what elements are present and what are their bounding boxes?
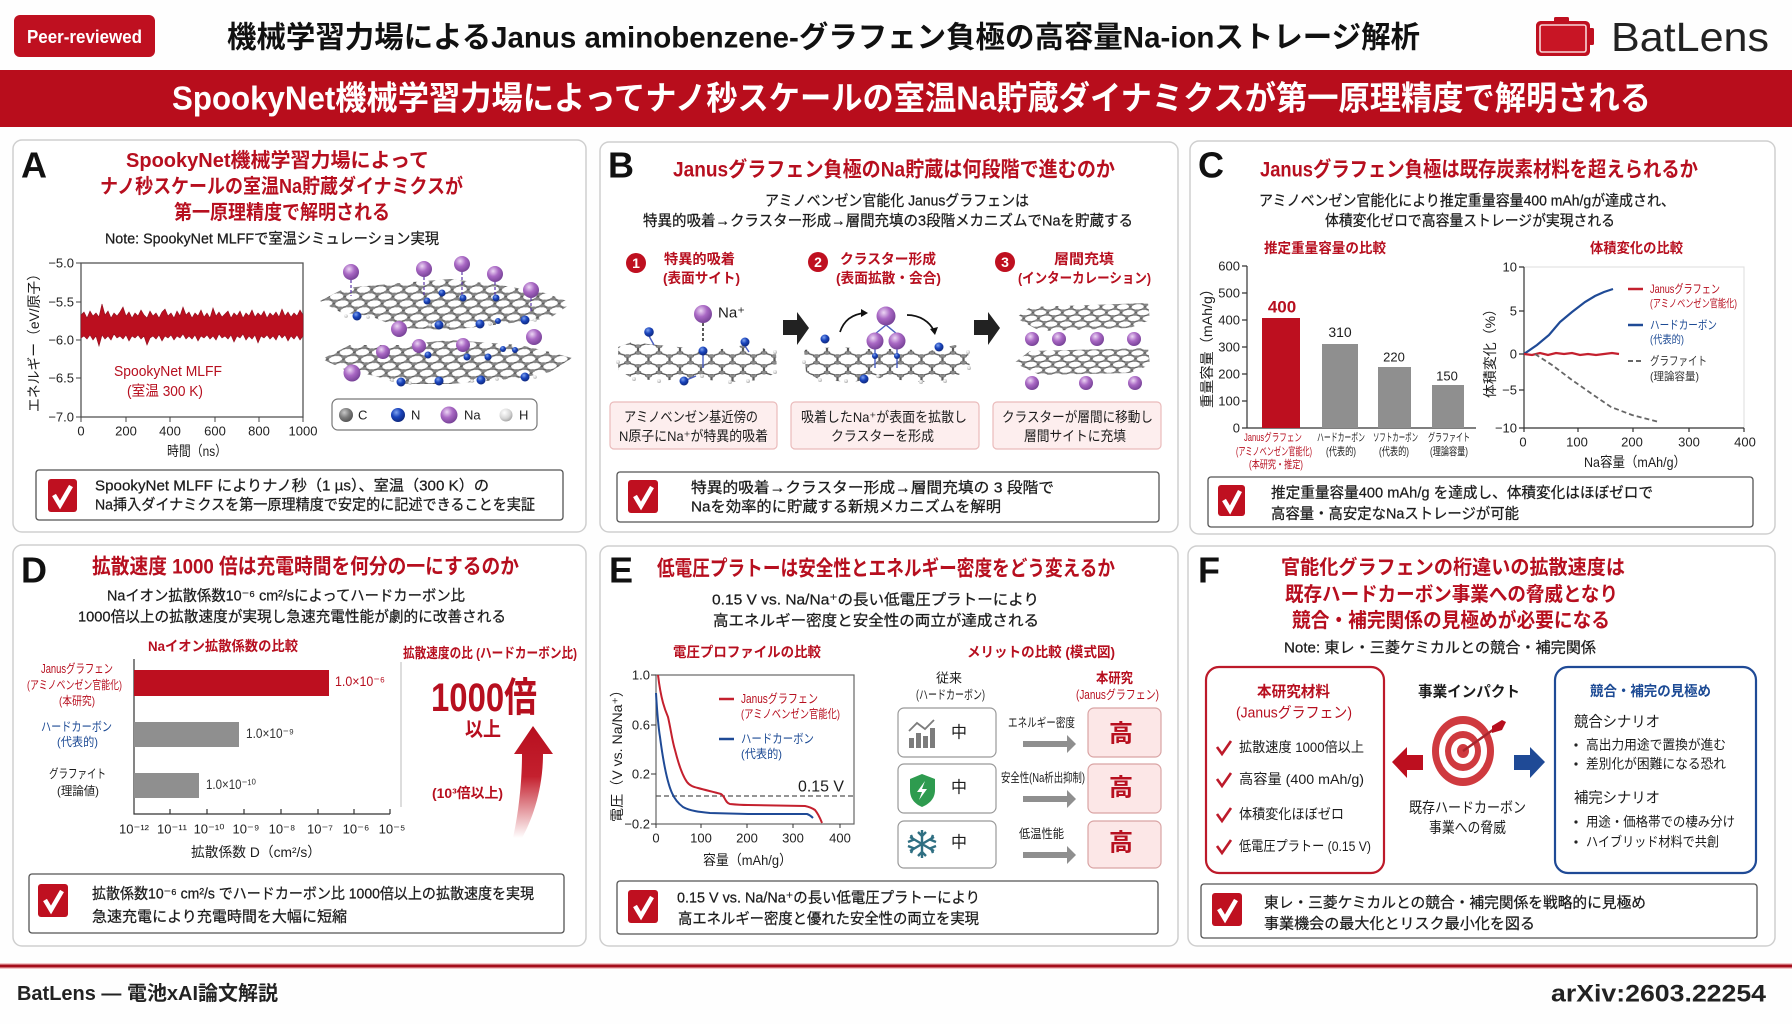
takeaway A [36, 470, 563, 520]
heading F [1281, 555, 1625, 632]
badge: peer reviewed: Peer-reviewed [27, 27, 142, 47]
bar chart: diffusion coefficient: 10⁻¹¹ [157, 822, 188, 836]
arrow: step 1 to 2 [783, 312, 809, 345]
center: business impact [1392, 682, 1545, 836]
panel A: energy simulation [13, 140, 586, 532]
line chart: volume change: グラファイト [1650, 354, 1707, 368]
line chart: voltage profile: 電圧プロファイルの比較 [673, 644, 821, 660]
axis labels: 400 [159, 424, 181, 438]
axis labels: 600 [204, 424, 226, 438]
takeaway E: 0.15 V vs. Na/Na⁺の長い低電圧プラトーにより [677, 890, 980, 906]
icon: target [1432, 716, 1506, 786]
heading A: SpookyNet機械学習力場によって [126, 149, 429, 172]
molecule: step 1 adsorption [616, 304, 777, 386]
line chart: voltage profile: 300 [782, 830, 804, 846]
line chart: energy vs time [26, 256, 317, 459]
line chart: volume change: 体積変化（%） [1482, 302, 1498, 398]
bar chart: diffusion coefficient: (アミノベンゼン官能化) [27, 678, 122, 692]
line chart: volume change: −5 [1502, 382, 1517, 398]
bar chart: diffusion coefficient: Naイオン拡散係数の比較 [148, 638, 298, 654]
comparison diagram: merits: 従来 [936, 670, 962, 686]
bar chart: capacity: ソフトカーボン [1373, 431, 1418, 444]
arrow: right [1514, 747, 1545, 778]
bar chart: diffusion coefficient: 1.0×10⁻⁶ [335, 673, 385, 689]
step 1 heading [626, 251, 740, 286]
bar chart: diffusion coefficient: 10⁻¹⁰ [194, 822, 224, 836]
bar chart: diffusion coefficient: 10⁻⁸ [269, 822, 295, 836]
letter F: F [1198, 550, 1220, 590]
subtitle C: 体積変化ゼロで高容量ストレージが実現される [1325, 212, 1615, 230]
card: competition and complement: 補完シナリオ [1574, 790, 1660, 806]
bar chart: capacity: 220 [1383, 350, 1405, 364]
line chart: voltage profile [609, 644, 854, 868]
panel E: voltage plateau [600, 546, 1178, 946]
bar chart: diffusion coefficient: (本研究) [59, 694, 95, 708]
caption step 1 [610, 402, 777, 449]
row: safety: 安全性(Na析出抑制) [1001, 771, 1085, 785]
bar chart: capacity: (理論容量) [1430, 444, 1468, 458]
card: competition and complement: 差別化が困難になる恐れ [1586, 756, 1726, 772]
row: energy density: 高 [1109, 720, 1133, 748]
line chart: volume change: (理論容量) [1650, 369, 1699, 383]
molecule: bilayer graphene with Na [320, 256, 572, 386]
row: safety: 高 [1109, 774, 1133, 802]
bar chart: capacity: 推定重量容量の比較 [1264, 240, 1386, 256]
line chart: volume change: Janusグラフェン [1650, 282, 1720, 296]
molecule: step 3 interlayer [1014, 303, 1150, 390]
axis labels: −6.0 [48, 332, 74, 348]
row: energy density: 中 [951, 724, 967, 742]
bar chart: capacity [1199, 240, 1476, 471]
takeaway A: Na挿入ダイナミクスを第一原理精度で安定的に記述できることを実証 [95, 496, 535, 514]
letter A: A [21, 144, 47, 186]
bar chart: diffusion coefficient: Janusグラフェン [41, 662, 113, 676]
caption step 2: 吸着したNa⁺が表面を拡散し [801, 409, 967, 425]
panel D: diffusion [13, 545, 586, 946]
bar chart: capacity: 600 [1218, 258, 1240, 274]
row: energy density: エネルギー密度 [1008, 715, 1075, 730]
step 3 heading: (インターカレーション) [1018, 270, 1151, 286]
bar chart: diffusion coefficient: (理論値) [57, 783, 99, 798]
bar chart: diffusion coefficient: 10⁻⁹ [233, 822, 259, 836]
bar chart: capacity: 150 [1436, 368, 1458, 384]
footer: arXiv:2603.22254 [1551, 980, 1767, 1008]
heading A [100, 149, 463, 224]
callout: 1000x ratio: 1000倍 [431, 676, 537, 720]
letter E: E [609, 550, 633, 590]
logo: BatLens battery: BatLens [1611, 14, 1769, 60]
line chart: volume change: ハードカーボン [1650, 318, 1717, 332]
bar chart: capacity: (代表的) [1326, 444, 1356, 458]
takeaway E: 高エネルギー密度と優れた安全性の両立を実現 [678, 910, 979, 928]
panel C: capacity and volume [1190, 141, 1775, 534]
comparison diagram: merits: (Janusグラフェン) [1076, 688, 1159, 702]
axis labels: 0 [77, 424, 85, 438]
line chart: voltage profile: 1.0 [632, 668, 650, 682]
line chart: voltage profile: 200 [736, 830, 758, 846]
legend: atoms: H [519, 408, 528, 422]
callout: 1000x ratio: 拡散速度の比 (ハードカーボン比) [403, 645, 577, 661]
subtitle D: Naイオン拡散係数10⁻⁶ cm²/sによってハードカーボン比 [107, 588, 465, 604]
row: safety [898, 764, 1161, 813]
banner headline [0, 70, 1792, 127]
subtitle E: 0.15 V vs. Na/Na⁺の長い低電圧プラトーにより [712, 592, 1039, 608]
comparison diagram: merits: メリットの比較 (模式図) [967, 644, 1115, 660]
line chart: voltage profile: 電圧（V vs. Na/Na⁺） [609, 683, 625, 822]
heading A: ナノ秒スケールの室温Na貯蔵ダイナミクスが [100, 174, 463, 198]
legend: atoms [332, 399, 537, 430]
bar chart: capacity: (代表的) [1379, 444, 1409, 458]
line chart: volume change: 300 [1678, 434, 1700, 450]
legend: atoms: N [411, 408, 420, 422]
callout: 1000x ratio: 以上 [465, 718, 501, 741]
bar chart: capacity: 300 [1218, 340, 1240, 354]
line chart: voltage profile: (代表的) [741, 746, 782, 761]
subtitle B: 特異的吸着→クラスター形成→層間充填の3段階メカニズムでNaを貯蔵する [643, 212, 1133, 230]
takeaway C: 高容量・高安定なNaストレージが可能 [1271, 506, 1519, 522]
line chart: volume change: 0 [1519, 434, 1527, 450]
takeaway C: 推定重量容量400 mAh/g を達成し、体積変化はほぼゼロで [1271, 484, 1653, 502]
step 2 heading: (表面拡散・会合) [836, 270, 941, 286]
takeaway D: 拡散係数10⁻⁶ cm²/s でハードカーボン比 1000倍以上の拡散速度を実現 [92, 886, 534, 902]
line chart: voltage profile: ハードカーボン [741, 732, 814, 746]
takeaway E [617, 881, 1158, 934]
molecule: step 2 cluster [802, 306, 971, 384]
subtitle C [1259, 192, 1675, 230]
takeaway A: SpookyNet MLFF によりナノ秒（1 µs）、室温（300 K）の [95, 478, 489, 494]
card: this study material: 高容量 (400 mAh/g) [1239, 771, 1364, 787]
line chart: volume change: (代表的) [1650, 332, 1684, 346]
bar chart: capacity: 200 [1218, 366, 1240, 382]
bar chart: diffusion coefficient: グラファイト [49, 767, 106, 781]
caption step 2: クラスターを形成 [831, 428, 934, 444]
note F: Note: 東レ・三菱ケミカルとの競合・補完関係 [1284, 640, 1596, 656]
card: competition and complement [1555, 667, 1756, 873]
heading F: 官能化グラフェンの桁違いの拡散速度は [1281, 555, 1625, 579]
line chart: voltage profile: 400 [829, 830, 851, 846]
heading E: 低電圧プラトーは安全性とエネルギー密度をどう変えるか [657, 558, 1115, 580]
card: competition and complement: ハイブリッド材料で共創 [1586, 834, 1719, 850]
center: business impact: 事業インパクト [1418, 682, 1520, 700]
step 2 heading: 2 [814, 254, 822, 270]
line chart: voltage profile: 0.15 V [798, 778, 844, 796]
panel B: three-stage mechanism [600, 142, 1178, 532]
axis labels: 1000 [289, 424, 317, 438]
note A: Note: SpookyNet MLFFで室温シミュレーション実現 [105, 230, 439, 248]
callout: 1000x ratio: (10³倍以上) [432, 785, 503, 801]
axis labels: エネルギー（eV/原子） [26, 267, 42, 412]
line chart: volume change: 体積変化の比較 [1590, 240, 1683, 256]
axis labels: −6.5 [48, 370, 74, 386]
card: this study material: 拡散速度 1000倍以上 [1239, 739, 1364, 755]
comparison diagram: merits [898, 644, 1161, 868]
row: low temperature: 中 [951, 834, 967, 852]
bar chart: capacity: ハードカーボン [1317, 431, 1365, 444]
takeaway B: Naを効率的に貯蔵する新規メカニズムを解明 [691, 498, 1001, 516]
panel F: business impact [1188, 546, 1775, 946]
subtitle D: 1000倍以上の拡散速度が実現し急速充電性能が劇的に改善される [78, 608, 506, 626]
card: this study material: 体積変化ほぼゼロ [1239, 806, 1344, 822]
bar chart: diffusion coefficient: 1.0×10⁻⁹ [246, 725, 294, 741]
takeaway B [617, 472, 1159, 522]
caption step 2 [791, 402, 979, 449]
takeaway F: 事業機会の最大化とリスク最小化を図る [1264, 916, 1535, 932]
card: competition and complement: 競合・補完の見極め [1590, 683, 1711, 699]
line chart: voltage profile: Janusグラフェン [741, 692, 818, 706]
line chart: voltage profile: 0 [652, 830, 660, 846]
row: safety: 中 [951, 778, 967, 796]
heading C: Janusグラフェン負極は既存炭素材料を超えられるか [1260, 158, 1698, 182]
subtitle B: アミノベンゼン官能化 Janusグラフェンは [765, 192, 1029, 210]
axis labels: 200 [115, 424, 137, 438]
step 3 heading: 層間充填 [1054, 251, 1114, 267]
bar chart: capacity: Janusグラフェン [1244, 430, 1302, 444]
card: this study material: (Janusグラフェン) [1236, 704, 1352, 722]
subtitle E: 高エネルギー密度と安全性の両立が達成される [713, 612, 1039, 630]
line chart: voltage profile: 0.2 [632, 766, 650, 782]
caption step 3: クラスターが層間に移動し [1002, 409, 1153, 425]
card: competition and complement: 高出力用途で置換が進む [1586, 736, 1726, 752]
step 3 heading: 3 [1001, 254, 1009, 270]
line chart: voltage profile: (アミノベンゼン官能化) [741, 707, 840, 721]
line chart: volume change: 400 [1734, 434, 1756, 450]
bar chart: capacity: (アミノベンゼン官能化) [1236, 444, 1312, 458]
letter B: B [608, 144, 634, 186]
bar chart: diffusion coefficient [27, 638, 405, 860]
footer: BatLens — 電池xAI論文解説 [17, 982, 278, 1005]
legend: atoms: Na [464, 408, 481, 422]
step 2 heading: クラスター形成 [840, 251, 936, 267]
subtitle C: アミノベンゼン官能化により推定重量容量400 mAh/gが達成され、 [1259, 192, 1675, 210]
line chart: volume change: 10 [1503, 260, 1517, 274]
bar chart: capacity: 400 [1218, 312, 1240, 328]
arrow: up [513, 726, 553, 838]
takeaway F: 東レ・三菱ケミカルとの競合・補完関係を戦略的に見極め [1264, 894, 1646, 912]
center: business impact: 事業への脅威 [1429, 820, 1506, 836]
line chart: volume change [1482, 240, 1756, 470]
card: competition and complement: 用途・価格帯での棲み分け [1586, 814, 1735, 830]
subtitle E [712, 592, 1039, 630]
step 2 heading [808, 251, 941, 286]
line chart: voltage profile: 容量（mAh/g） [703, 852, 792, 868]
letter D: D [21, 550, 47, 590]
line chart: volume change: (アミノベンゼン官能化) [1650, 296, 1737, 310]
heading B: Janusグラフェン負極のNa貯蔵は何段階で進むのか [673, 158, 1115, 182]
heading A: 第一原理精度で解明される [174, 201, 390, 224]
line chart: volume change: 5 [1510, 304, 1517, 318]
bar chart: diffusion coefficient: (代表的) [57, 734, 98, 749]
comparison diagram: merits: 本研究 [1096, 670, 1133, 686]
line chart: voltage profile: 100 [690, 830, 712, 846]
banner headline: SpookyNet機械学習力場によってナノ秒スケールの室温Na貯蔵ダイナミクスが第一原理精度で解明される [172, 80, 1651, 116]
takeaway C [1208, 477, 1753, 527]
molecule: step 1 adsorption: Na⁺ [718, 304, 745, 322]
step 1 heading: 1 [632, 255, 640, 271]
legend: atoms: C [358, 408, 367, 422]
bar chart: capacity: グラファイト [1428, 430, 1470, 444]
line chart: volume change: 0 [1510, 346, 1517, 362]
bar chart: diffusion coefficient: 10⁻⁵ [379, 822, 405, 836]
row: low temperature: 高 [1109, 830, 1133, 856]
bar chart: capacity: 500 [1218, 286, 1240, 300]
bar chart: diffusion coefficient: 10⁻⁷ [307, 822, 333, 836]
heading F: 既存ハードカーボン事業への脅威となり [1285, 582, 1618, 606]
line chart: volume change: −10 [1495, 420, 1517, 436]
logo: BatLens battery [1536, 14, 1769, 60]
takeaway F [1201, 884, 1757, 938]
line chart: voltage profile: −0.2 [624, 816, 650, 832]
line chart: volume change: 100 [1566, 434, 1588, 450]
series label: SpookyNet MLFF [114, 364, 222, 380]
bar chart: diffusion coefficient: 1.0×10⁻¹⁰ [206, 776, 256, 792]
step 1 heading: 特異的吸着 [664, 251, 735, 267]
bar chart: diffusion coefficient: 拡散係数 D（cm²/s） [191, 844, 321, 860]
subtitle B [643, 192, 1133, 230]
axis labels: 800 [248, 424, 270, 438]
bar chart: diffusion coefficient: ハードカーボン [41, 720, 112, 734]
callout: 1000x ratio [401, 645, 577, 838]
series label: (室温 300 K) [127, 383, 203, 400]
takeaway D: 急速充電により充電時間を大幅に短縮 [92, 908, 347, 926]
caption step 1: N原子にNa⁺が特異的吸着 [619, 428, 768, 444]
line chart: voltage profile: 0.6 [632, 718, 650, 732]
bar chart: capacity: 重量容量（mAh/g） [1199, 282, 1215, 408]
step 1 heading: (表面サイト) [663, 270, 740, 286]
bar chart: capacity: 100 [1218, 394, 1240, 408]
bar chart: capacity: (本研究・推定) [1249, 457, 1303, 471]
takeaway D [29, 874, 564, 933]
caption step 1: アミノベンゼン基近傍の [624, 409, 758, 425]
axis labels: −5.5 [48, 294, 74, 310]
subtitle D [78, 588, 506, 626]
series label [114, 364, 222, 400]
axis labels [26, 256, 317, 459]
bar chart: diffusion coefficient: 10⁻¹² [119, 822, 150, 836]
arrow: step 2 to 3 [974, 312, 1000, 345]
line chart: volume change: 200 [1621, 434, 1643, 450]
main title: 機械学習力場によるJanus aminobenzene-グラフェン負極の高容量Na-ionストレージ解析 [227, 22, 1420, 54]
takeaway B: 特異的吸着→クラスター形成→層間充填の 3 段階で [691, 480, 1054, 496]
caption step 3: 層間サイトに充填 [1024, 428, 1126, 444]
bar chart: capacity: 310 [1328, 324, 1352, 340]
card: this study material [1206, 667, 1384, 873]
bar chart: diffusion coefficient: 10⁻⁶ [343, 822, 369, 836]
center: business impact: 既存ハードカーボン [1409, 800, 1526, 816]
badge: peer reviewed [14, 15, 155, 57]
footer [0, 963, 1792, 1008]
bar chart: capacity: 400 [1268, 298, 1296, 316]
caption step 3 [993, 402, 1161, 449]
card: this study material: 低電圧プラトー (0.15 V) [1239, 838, 1371, 854]
row: energy density [898, 708, 1161, 757]
letter C: C [1198, 144, 1224, 186]
axis labels: −7.0 [48, 410, 74, 424]
comparison diagram: merits: (ハードカーボン) [916, 688, 985, 702]
axis labels: −5.0 [48, 256, 74, 270]
card: this study material: 本研究材料 [1257, 682, 1330, 700]
heading F: 競合・補完関係の見極めが必要になる [1292, 608, 1610, 632]
line chart: volume change: Na容量（mAh/g） [1584, 454, 1686, 470]
bar chart: capacity: 0 [1233, 420, 1240, 436]
axis labels: 時間（ns） [167, 443, 227, 459]
step 3 heading [995, 251, 1151, 286]
arrow: left [1392, 747, 1423, 778]
heading D: 拡散速度 1000 倍は充電時間を何分の一にするのか [92, 556, 519, 578]
row: low temperature [898, 821, 1161, 868]
row: low temperature: 低温性能 [1019, 826, 1064, 841]
card: competition and complement: 競合シナリオ [1574, 714, 1660, 730]
